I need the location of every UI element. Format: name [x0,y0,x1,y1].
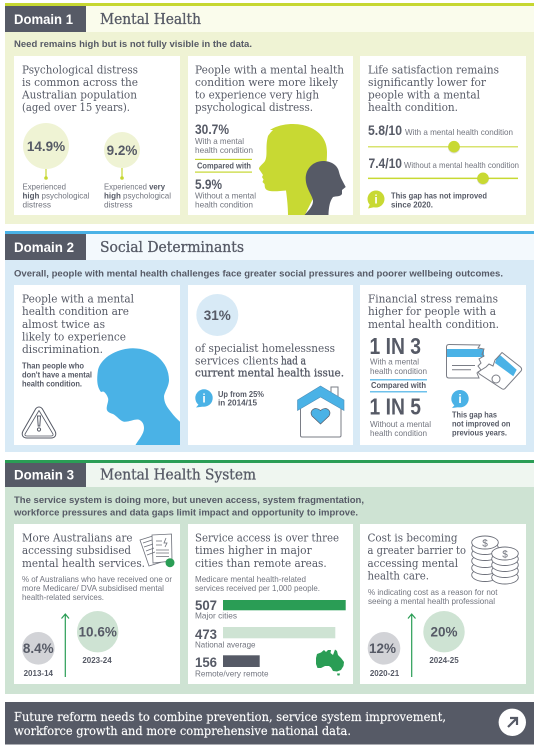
callout: gap not improved on previous years: This gap has [452,410,497,419]
stat: 5.9%: 5.9% [195,177,222,192]
subheading: domain 3 summary [13,495,364,519]
callout: gap not improved [368,190,487,210]
domain 2 badge: Domain 2 [14,240,74,255]
subheading: domain 2 summary: Overall, people with mental health challenges face greater social pressures and poorer wellbeing outcomes. [14,268,503,280]
bar chart: services per 1,000 people [195,598,346,678]
heading: social determinants: Social Determinants [100,240,244,256]
heading: mental health system: Mental Health System [100,468,256,484]
card heading: a greater barrier to [368,544,466,557]
description [195,575,320,593]
stat: 30.7%: 30.7% [195,122,229,137]
card heading [368,64,499,114]
compared with divider [195,159,252,173]
card heading: significantly lower for [368,76,487,89]
stat: 1 in 3: With a mental [370,358,419,367]
description: % of Australians who have received one or [22,575,172,584]
stat: 1 in 3: 1 IN 3 [370,333,421,359]
icon: arrow button [499,709,526,736]
subheading: domain 3 summary: workforce pressures and data gaps limit impact and opportunity to improve. [13,508,358,519]
card heading: health condition are [22,305,129,318]
callout: up from 25%: i [202,392,206,406]
arrow: upward trend [62,614,69,677]
description: services received per 1,000 people. [195,584,320,593]
slider: 5.8 out of 10 [368,123,518,154]
card heading [22,293,134,356]
description: more Medicare/ DVA subsidised mental [22,584,164,593]
compared with divider [370,379,427,392]
card: service access [188,524,353,684]
stat: 8.4% 2013-14: 8.4% [23,641,54,656]
icon: torn credit card [446,344,522,389]
slider: 7.4 out of 10: 7.4/10 [368,156,402,171]
comparison note [22,362,92,389]
stat: 5.9%: health condition [195,200,253,210]
card heading: discrimination. [22,343,103,356]
icon: two head silhouettes [259,124,346,215]
card heading: services clients [195,354,279,368]
panel: domain 2 social determinants [5,231,534,452]
stat: 9.2% very high distress [104,132,171,210]
card: discrimination [14,285,180,445]
stat: 20% 2024-25: 20% [430,624,458,640]
card: psychological distress [14,56,180,215]
card heading [368,293,499,331]
card heading: current mental health issue. [195,366,344,380]
card heading: accessing subsidised [22,544,131,557]
icon: blue bowed head [97,348,180,445]
bar chart: services per 1,000 people: 473 [195,627,217,642]
icon: warning triangle [22,407,56,438]
card: likelihood of distress [188,56,353,215]
stat: 31% [196,294,238,336]
card heading: had a [281,354,306,368]
callout: gap not improved: i [374,192,378,206]
comparison note: don't have a mental [22,371,92,380]
stat: 5.9% [195,177,256,210]
card heading: times higher in major [195,544,312,557]
callout: up from 25% [195,389,264,408]
stat: 1 in 3 [370,333,427,376]
card heading: cities than remote areas. [195,557,327,570]
card heading: to experience very high [195,88,319,102]
icon: coin stacks [472,536,518,584]
callout: up from 25%: in 2014/15 [218,399,258,408]
bar chart: services per 1,000 people: 156 [195,655,217,670]
card: financial stress [360,285,526,445]
subheading: domain 3 summary: The service system is doing more, but uneven access, system fragmentation, [14,495,364,506]
subheading: domain 1 summary: Need remains high but is not fully visible in the data. [14,39,252,50]
callout: gap not improved on previous years: previous years. [452,428,507,438]
domain 2 badge [5,234,86,260]
description: seeing a mental health professional [368,597,495,606]
card heading [195,342,344,380]
icon: map of Australia [316,650,344,676]
callout: gap not improved on previous years: not improved on [452,420,510,428]
card heading: mental health services. [22,557,145,570]
callout: gap not improved on previous years [451,390,510,438]
stat: 1 in 5: Without a mental [370,420,431,429]
comparison note: health condition. [22,380,82,389]
footer text [14,709,446,738]
footer text: Future reform needs to combine prevention, service system improvement, [14,709,446,724]
domain 1 badge [5,6,86,32]
stat: 5.9%: Without a mental [195,192,256,200]
stat: 14.9% high distress: 14.9% [27,139,65,154]
callout: gap not improved on previous years: i [458,392,462,406]
card heading: almost twice as [22,318,105,331]
card heading: More Australians are [22,532,132,545]
bar chart: services per 1,000 people: Major cities [195,612,237,621]
description: Medicare mental health-related [195,575,306,584]
stat: 14.9% high distress: Experienced [22,182,66,192]
stat: 1 in 5: health condition [370,429,427,438]
card heading: people with a mental [368,88,480,102]
card heading [22,532,145,570]
card heading [195,64,344,114]
card heading: likely to experience [22,330,126,344]
stat: 9.2% very high distress: Experienced very [104,182,165,192]
panel: domain 1 mental health [5,3,534,224]
stat: 10.6% 2023-24 [77,611,118,665]
stat: 30.7%: health condition [195,146,253,155]
card heading [195,532,339,570]
domain 3 badge: Domain 3 [14,468,74,482]
card heading: Financial stress remains [368,293,498,306]
card heading: health care. [368,570,429,583]
description: health-related services. [22,593,104,602]
card heading: accessing mental [368,557,458,570]
slider: 5.8 out of 10: With a mental health condition [405,128,513,137]
stat: 8.4% 2013-14: 2013-14 [24,669,54,678]
domain 3 badge [5,463,86,487]
panel: domain 3 mental health system [5,460,534,694]
card heading: Psychological distress [22,64,138,76]
stat: 9.2% very high distress: 9.2% [107,143,137,158]
stat: 12% 2020-21: 2020-21 [370,669,400,678]
stat: 14.9% high distress: distress [22,200,51,210]
card heading: People with a mental health [195,64,344,76]
icon: documents with coin [140,534,174,567]
card heading [21,64,138,114]
stat: 1 in 5: 1 IN 5 [370,394,421,420]
description [22,575,172,602]
slider: 7.4 out of 10 [368,156,519,185]
card: subsidised services [14,524,180,684]
domain 1 badge: Domain 1 [14,12,73,27]
card heading: psychological distress. [195,101,313,114]
arrow: upward trend [408,614,416,677]
stat: 9.2% very high distress: high psychological [104,192,171,200]
footer banner [5,702,534,744]
stat: 10.6% 2023-24: 2023-24 [82,656,112,665]
slider: 7.4 out of 10: Without a mental health condition [404,161,519,170]
bar chart: services per 1,000 people: 507 [195,598,217,613]
stat: 1 in 3: health condition [370,367,427,376]
card: cost barrier [360,524,526,684]
bar chart: services per 1,000 people: National average [195,640,256,650]
stat: 20% 2024-25 [423,611,465,665]
card heading: Cost is becoming [368,532,458,545]
stat: 30.7%: With a mental [195,137,244,146]
slider: 5.8 out of 10: 5.8/10 [368,123,402,138]
card heading: higher for people with a [368,305,496,318]
icon: dollar signs: $ [482,538,488,550]
stat: 12% 2020-21: 12% [369,641,396,656]
card heading [368,532,466,583]
stat: 20% 2024-25: 2024-25 [429,656,459,665]
stat: 14.9% high distress: high psychological [22,192,90,200]
heading: mental health: Mental Health [100,12,201,28]
stat: 9.2% very high distress: distress [104,200,132,210]
compared with divider: Compared with [371,381,426,390]
stat: 10.6% 2023-24: 10.6% [79,624,117,640]
description: % indicating cost as a reason for not [368,588,498,597]
card heading: People with a mental [22,293,134,306]
stat: 1 in 5 [370,394,431,438]
card heading: Australian population [21,88,137,102]
card heading: condition were more likely [195,76,339,89]
card heading: is common across the [22,76,138,89]
card heading: Life satisfaction remains [368,64,499,76]
footer text: workforce growth and more comprehensive national data. [14,723,351,738]
card: homelessness services [188,285,353,445]
comparison note: Than people who [22,362,84,371]
callout: up from 25%: Up from 25% [218,390,264,399]
description [368,588,498,606]
card heading: of specialist homelessness [195,342,335,355]
icon: dollar signs: $ [502,550,508,560]
stat: 8.4% 2013-14 [22,632,55,678]
icon: dollar signs [482,538,508,560]
stat: 30.7% [195,122,253,155]
compared with divider: Compared with [197,162,251,170]
callout: gap not improved: since 2020. [391,200,433,210]
icon: house with heart [298,386,344,437]
callout: gap not improved: This gap has not improved [391,192,487,200]
stat: 12% 2020-21 [368,632,400,678]
card heading: (aged over 15 years). [22,101,130,114]
card: life satisfaction [360,56,526,215]
stat: 31%: 31% [204,308,231,323]
stat: 14.9% high distress [22,123,90,210]
card heading: mental health condition. [368,318,499,331]
card heading: health condition. [368,101,458,114]
card heading: Service access is over three [195,532,339,545]
bar chart: services per 1,000 people: Remote/very remote [195,669,269,678]
